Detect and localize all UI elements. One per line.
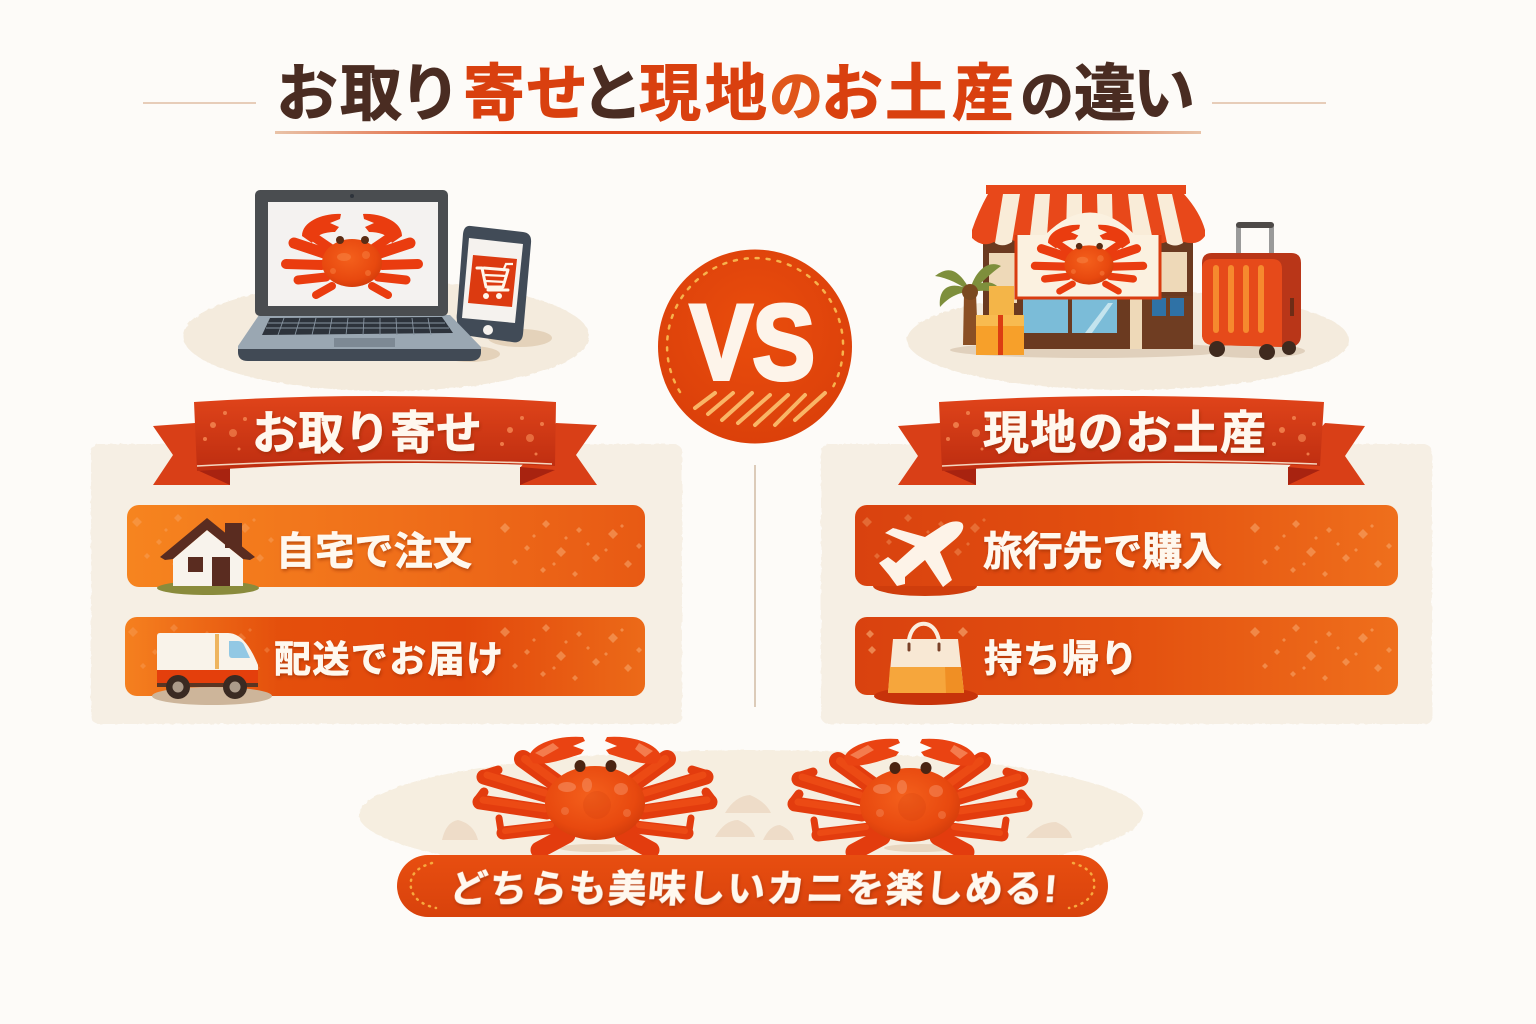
icon: delivery truck [152, 633, 272, 705]
VS badge [658, 250, 852, 444]
crab right [793, 739, 1027, 852]
panel: right background [821, 444, 1432, 724]
icon: airplane [879, 521, 963, 587]
row: 配送でお届け [125, 617, 645, 705]
row: 旅行先で購入: 旅行先で購入 [983, 530, 1222, 574]
row: 旅行先で購入 [855, 505, 1398, 596]
row: 配送でお届け: 配送でお届け [274, 639, 503, 680]
VS badge: VS [690, 282, 815, 402]
row: 持ち帰り [855, 617, 1398, 705]
center divider [754, 465, 756, 707]
row: 持ち帰り: 持ち帰り [984, 639, 1138, 681]
ribbon: 現地のお土産 [898, 396, 1365, 485]
illustration: laptop and smartphone [183, 190, 589, 391]
icon: laptop [238, 190, 481, 361]
shop sign with crab [1016, 212, 1160, 298]
icon: palm tree [935, 264, 1003, 345]
shop building [983, 240, 1193, 349]
row: 自宅で注文 [127, 505, 645, 595]
title: お取り寄せと現地のお土産の違い [276, 60, 1195, 129]
icon: smartphone [457, 226, 531, 342]
crab left [478, 737, 712, 850]
row: 自宅で注文: 自宅で注文 [276, 531, 472, 574]
ribbon: 現地のお土産: 現地のお土産 [983, 407, 1266, 459]
banner: closing message [397, 855, 1108, 917]
illustration: shop, palm, boxes and suitcase [907, 185, 1349, 390]
icon: gift boxes [976, 286, 1024, 355]
ribbon: お取り寄せ [153, 396, 597, 485]
icon: shopping bag [874, 624, 978, 705]
banner: closing message: どちらも美味しいカニを楽しめる! [448, 869, 1058, 911]
icon: suitcase [1202, 222, 1301, 360]
panel: left background [91, 444, 682, 724]
icon: house [157, 518, 259, 595]
shop awning [972, 185, 1205, 246]
sand ground [359, 750, 1143, 880]
ribbon: お取り寄せ: お取り寄せ [252, 407, 482, 459]
